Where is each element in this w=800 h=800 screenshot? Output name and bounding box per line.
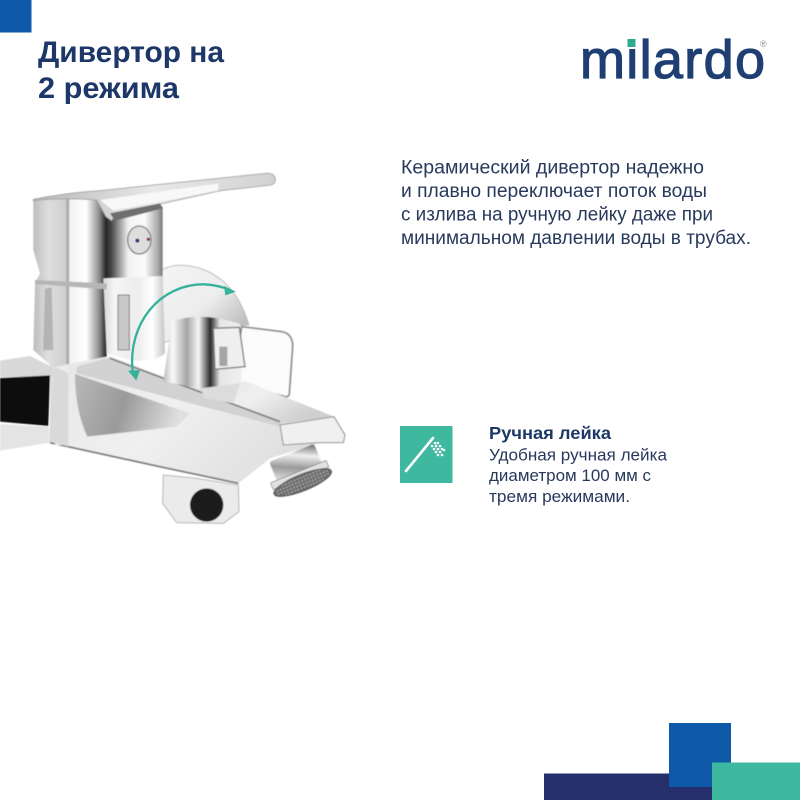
icon: hand shower (400, 426, 452, 483)
description text: минимальном давлении воды в трубах. (401, 228, 751, 249)
product photo: faucet with diverter (0, 173, 345, 523)
logo: milardo: ® (760, 39, 767, 49)
feature: hand shower text: Ручная лейка (489, 423, 611, 443)
title: 2 режима (38, 72, 179, 105)
diverter rotation arrow (128, 284, 236, 381)
description text (401, 158, 751, 249)
main column (33, 195, 107, 373)
title: Дивертор на (38, 36, 224, 69)
feature: hand shower text (489, 423, 668, 506)
logo: milardo: milardo (580, 30, 765, 90)
feature: hand shower text: Удобная ручная лейка (489, 446, 668, 464)
title (38, 36, 224, 105)
lower collar (103, 276, 165, 361)
description text: с излива на ручную лейку даже при (401, 204, 713, 226)
decorative corner square (0, 0, 32, 32)
spout (48, 356, 345, 483)
description text: и плавно переключает поток воды (401, 181, 707, 202)
lever handle (33, 173, 275, 221)
feature: hand shower text: тремя режимами. (489, 488, 630, 506)
indicator button (128, 226, 151, 254)
wall mount bracket (233, 327, 293, 397)
left pipe (0, 356, 52, 451)
cartridge column (103, 207, 163, 282)
diverter knob (163, 317, 245, 403)
bottom nut (163, 475, 239, 523)
decorative corner blocks (544, 723, 800, 800)
description text: Керамический дивертор надежно (401, 158, 704, 178)
wall disc (160, 265, 249, 343)
feature: hand shower text: диаметром 100 мм с (489, 467, 651, 485)
aerator (262, 442, 334, 501)
